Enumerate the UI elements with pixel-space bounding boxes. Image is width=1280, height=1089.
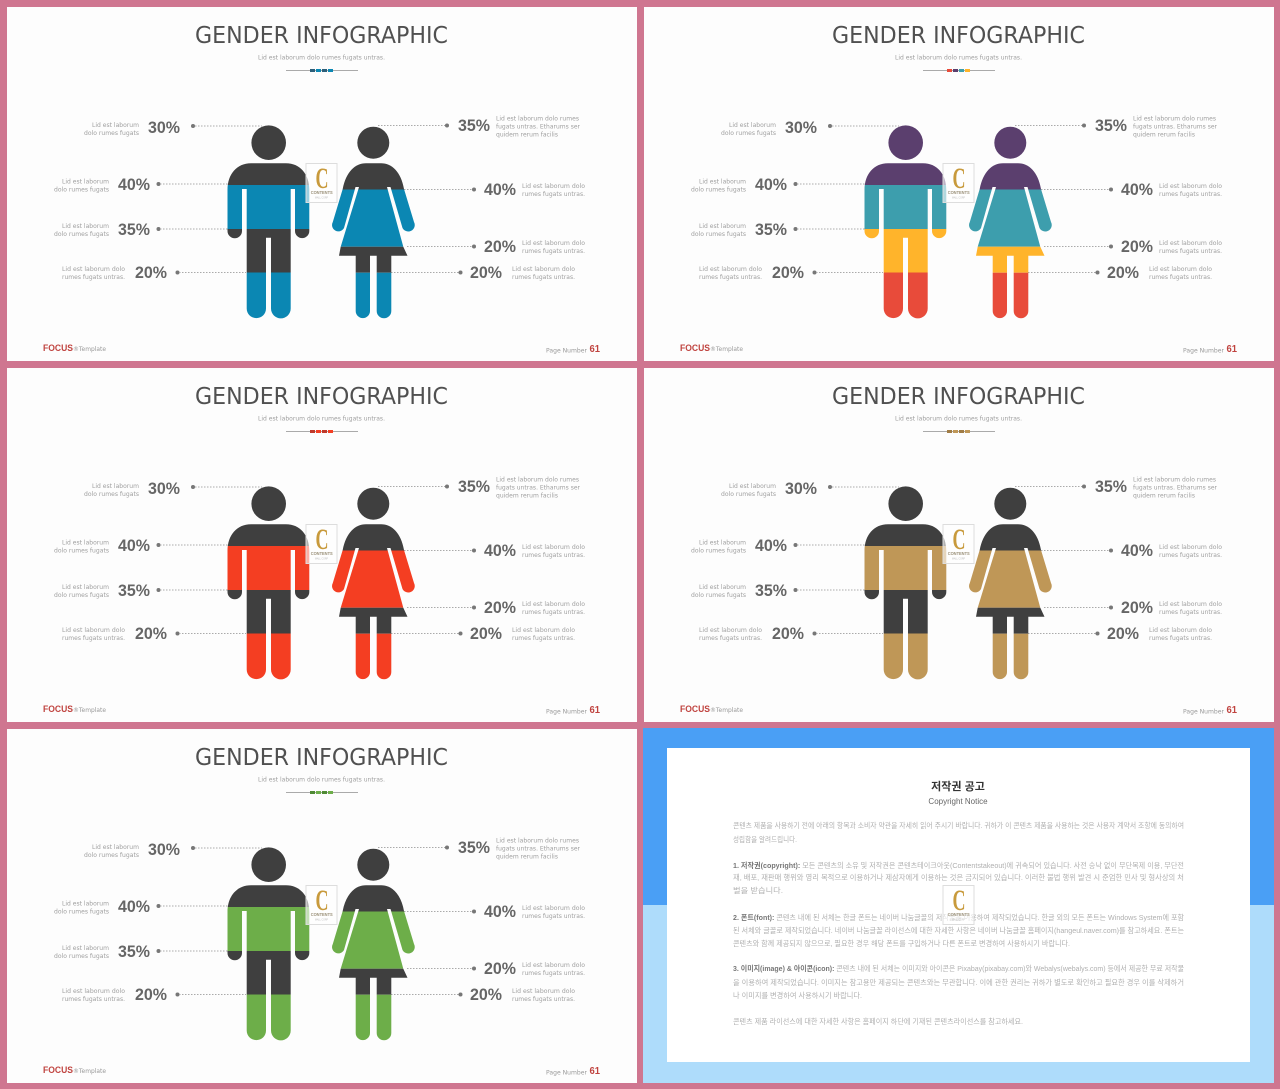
- watermark logo: [943, 523, 974, 564]
- callout: right 35%: Lid est laborum dolo rumes: [496, 116, 579, 122]
- section 3: image and icon: [733, 963, 1184, 1000]
- callout: left 30%: dolo rumes fugats: [721, 130, 776, 137]
- panel: blue slide: [7, 7, 637, 361]
- callout: left 35%: Lid est laborum: [62, 584, 109, 591]
- page number: [546, 705, 600, 716]
- callout: left 20%: Lid est laborum dolo: [699, 266, 762, 273]
- callout: right 35%: quidem rerum facilis: [496, 854, 558, 860]
- icon: man figure: [864, 486, 946, 680]
- callout: right 20% upper: Lid est laborum dolo: [522, 240, 585, 247]
- intro paragraph: [733, 820, 1184, 844]
- title: GENDER INFOGRAPHIC: [832, 23, 1085, 49]
- callout: right 40%: rumes fugats untras.: [522, 191, 585, 198]
- icon: woman figure: [969, 126, 1052, 318]
- watermark logo: C: [316, 162, 328, 195]
- callout: left 30%: 30%: [148, 119, 180, 137]
- callout: left 35%: Lid est laborum: [62, 223, 109, 230]
- intro paragraph: 성립함을 알려드립니다.: [733, 834, 797, 844]
- callout: right 20% upper: Lid est laborum dolo: [522, 962, 585, 969]
- page number: Page Number: [546, 1070, 588, 1076]
- callout: left 20%: Lid est laborum dolo: [62, 627, 125, 634]
- notice subheading: Copyright Notice: [928, 797, 988, 806]
- subtitle: Lid est laborum dolo rumes fugats untras.: [895, 416, 1022, 422]
- callout: left 40%: [54, 537, 228, 555]
- callout: left 30%: Lid est laborum: [729, 483, 776, 490]
- callout: left 20%: rumes fugats untras.: [62, 274, 125, 281]
- callout: left 30%: [84, 480, 262, 498]
- callout: left 40%: Lid est laborum: [699, 540, 746, 546]
- callout: left 20%: rumes fugats untras.: [62, 996, 125, 1003]
- section 2: font: 콘텐츠와 함께 제공되지 않으므로, 필요한 경우 해당 폰트를 구입하거나 다른 폰트로 변경하여 사용하시기 바랍니다.: [733, 938, 1070, 948]
- section 1: copyright: [733, 860, 1184, 895]
- callout: right 35%: 35%: [458, 839, 490, 857]
- callout: right 35%: 35%: [1095, 117, 1127, 135]
- notice heading: 저작권 공고: [931, 779, 985, 793]
- callout: left 35%: [691, 221, 865, 239]
- callout: right 20% lower: 20%: [470, 264, 502, 282]
- page number: Page Number: [1183, 348, 1225, 354]
- callout: left 20%: [62, 625, 246, 643]
- icon: man figure: [228, 486, 310, 680]
- title divider: [286, 430, 358, 433]
- watermark logo: C: [952, 162, 966, 195]
- callout: left 35%: Lid est laborum: [62, 945, 109, 952]
- callout: left 40%: Lid est laborum: [699, 178, 746, 186]
- section 1: copyright: 재, 배포, 재판매 행위와 영리 목적으로 이용하거나 제삼자에게 이용하는 것은 금지되어 있습니다. 이러한 불법 행위 발견 시 준엄한 민사 및 형사상의 처: [733, 872, 1184, 882]
- callout: left 30%: dolo rumes fugats: [721, 491, 776, 498]
- watermark logo: MALL CORP: [952, 918, 965, 922]
- callout: right 20% upper: rumes fugats untras.: [522, 609, 585, 616]
- callout: left 35%: 35%: [118, 943, 150, 961]
- watermark logo: [306, 884, 337, 924]
- callout: right 40%: rumes fugats untras.: [1159, 191, 1222, 198]
- callout: left 35%: dolo rumes fugats: [691, 592, 746, 599]
- callout: left 30%: 30%: [148, 841, 180, 859]
- callout: right 35%: Lid est laborum dolo rumes: [1133, 116, 1216, 122]
- callout: right 20% lower: [1028, 625, 1212, 643]
- panel: green slide: [7, 729, 637, 1083]
- callout: left 30%: [84, 841, 262, 859]
- callout: left 40%: dolo rumes fugats: [54, 186, 109, 194]
- footer brand: ®Template: [73, 1068, 106, 1075]
- icon: man figure: [864, 125, 946, 318]
- panel: copyright notice: [643, 728, 1274, 1083]
- callout: left 20%: rumes fugats untras.: [699, 635, 762, 642]
- section 1: copyright: 벌을 받습니다.: [733, 885, 783, 895]
- footer brand: FOCUS: [43, 343, 73, 354]
- callout: right 40%: [404, 181, 585, 199]
- callout: right 40%: Lid est laborum dolo: [522, 544, 585, 551]
- callout: right 20% upper: 20%: [484, 599, 516, 617]
- icon: woman figure: [969, 488, 1052, 680]
- title divider: [923, 69, 995, 72]
- page number: Page Number: [1183, 708, 1225, 716]
- callout: left 40%: Lid est laborum: [62, 540, 109, 546]
- watermark logo: MALL CORP: [952, 196, 965, 200]
- callout: left 35%: 35%: [755, 221, 787, 239]
- callout: left 35%: 35%: [755, 582, 787, 600]
- watermark logo: C: [952, 523, 966, 556]
- callout: right 20% upper: 20%: [1121, 238, 1153, 256]
- intro paragraph: 콘텐츠 제품을 사용하기 전에 아래의 항목과 소비자 약관을 자세히 읽어 주시기 바랍니다. 귀하가 이 콘텐츠 제품을 사용하는 것은 사용자 계약서 조항에 동의하여: [733, 820, 1184, 830]
- callout: right 35%: Lid est laborum dolo rumes: [496, 476, 579, 484]
- section 1: copyright: 1. 저작권(copyright): 모든 콘텐츠의 소유 및 저작권은 콘텐츠테이크아웃(Contentstakeout)에 귀속되어 있습니다. 사전 승낙 없이 무단복제 이용, 무단전: [733, 860, 1184, 870]
- panel: tan slide: [644, 368, 1274, 722]
- callout: left 20%: Lid est laborum dolo: [62, 266, 125, 273]
- closing line: 콘텐츠 제품 라이선스에 대한 자세한 사항은 홈페이지 하단에 기재된 콘텐츠라이선스를 참고하세요.: [733, 1016, 1023, 1026]
- callout: right 20% upper: 20%: [1121, 599, 1153, 617]
- callout: left 30%: [721, 480, 899, 498]
- title divider: [923, 430, 995, 433]
- callout: right 40%: [1041, 181, 1222, 199]
- callout: right 20% upper: [1044, 599, 1222, 617]
- callout: left 20%: rumes fugats untras.: [699, 274, 762, 281]
- callout: right 20% upper: rumes fugats untras.: [522, 248, 585, 255]
- callout: right 35%: Lid est laborum dolo rumes: [496, 838, 579, 844]
- page number: 61: [1226, 705, 1237, 716]
- callout: left 30%: Lid est laborum: [92, 122, 139, 129]
- watermark logo: CONTENTS: [948, 551, 970, 556]
- callout: right 20% lower: 20%: [1107, 625, 1139, 643]
- callout: right 20% lower: rumes fugats untras.: [512, 274, 575, 281]
- callout: left 40%: dolo rumes fugats: [691, 186, 746, 194]
- callout: right 20% upper: [407, 238, 585, 256]
- title divider: [286, 69, 358, 72]
- callout: right 40%: Lid est laborum dolo: [522, 905, 585, 912]
- callout: right 40%: 40%: [484, 903, 516, 921]
- callout: left 35%: 35%: [118, 221, 150, 239]
- page number: [1183, 344, 1237, 355]
- callout: right 20% upper: rumes fugats untras.: [1159, 248, 1222, 255]
- page number: [546, 1066, 600, 1077]
- callout: right 20% lower: 20%: [470, 986, 502, 1004]
- callout: right 35%: 35%: [458, 478, 490, 496]
- callout: right 20% lower: rumes fugats untras.: [512, 996, 575, 1003]
- icon: woman figure: [332, 848, 415, 1040]
- callout: right 40%: [1041, 542, 1222, 560]
- page number: 61: [1226, 344, 1237, 355]
- page number: Page Number: [546, 348, 588, 354]
- callout: right 20% lower: Lid est laborum dolo: [512, 266, 575, 273]
- icon: woman figure: [332, 126, 415, 318]
- watermark logo: [943, 162, 974, 202]
- callout: right 20% lower: Lid est laborum dolo: [512, 988, 575, 995]
- callout: right 40%: [404, 903, 585, 921]
- callout: left 35%: Lid est laborum: [699, 584, 746, 591]
- section 3: image and icon: 3. 이미지(image) & 아이콘(icon): 콘텐츠 내에 된 서체는 이미지와 아이콘은 Pixabay(pixabay.com)와 Webalys(webalys.com) 등에서 제공한 무료 저작물: [733, 963, 1184, 973]
- callout: left 30%: 30%: [148, 480, 180, 498]
- watermark logo: C: [316, 884, 328, 917]
- callout: left 30%: Lid est laborum: [729, 122, 776, 129]
- callout: right 20% upper: Lid est laborum dolo: [1159, 601, 1222, 608]
- callout: right 35%: quidem rerum facilis: [496, 132, 558, 138]
- callout: right 40%: [404, 542, 585, 560]
- callout: right 20% lower: 20%: [1107, 264, 1139, 282]
- footer brand: [43, 343, 106, 354]
- watermark logo: CONTENTS: [948, 912, 970, 917]
- watermark logo: MALL CORP: [315, 556, 328, 560]
- callout: left 30%: [721, 119, 899, 137]
- watermark logo: CONTENTS: [311, 190, 333, 195]
- callout: left 20%: 20%: [135, 986, 167, 1004]
- callout: right 35%: [378, 476, 580, 500]
- watermark logo: CONTENTS: [311, 551, 333, 556]
- callout: right 35%: [1015, 116, 1217, 138]
- callout: left 35%: Lid est laborum: [699, 223, 746, 230]
- callout: left 35%: 35%: [118, 582, 150, 600]
- footer brand: ®Template: [73, 707, 106, 714]
- callout: right 40%: Lid est laborum dolo: [522, 183, 585, 190]
- callout: left 30%: dolo rumes fugats: [84, 491, 139, 498]
- icon: man figure: [228, 847, 310, 1040]
- callout: left 20%: Lid est laborum dolo: [62, 988, 125, 995]
- page number: 61: [590, 705, 600, 716]
- callout: left 20%: rumes fugats untras.: [62, 635, 125, 642]
- callout: left 35%: [54, 582, 228, 600]
- callout: left 35%: dolo rumes fugats: [691, 231, 746, 238]
- callout: left 40%: Lid est laborum: [62, 178, 109, 186]
- callout: left 20%: [699, 264, 883, 282]
- callout: left 40%: Lid est laborum: [62, 900, 109, 908]
- page number: [546, 344, 600, 355]
- watermark logo: CONTENTS: [311, 912, 333, 917]
- callout: left 40%: dolo rumes fugats: [54, 548, 109, 554]
- callout: right 20% lower: rumes fugats untras.: [1149, 274, 1212, 281]
- callout: left 20%: [699, 625, 883, 643]
- callout: right 20% upper: 20%: [484, 960, 516, 978]
- callout: right 35%: Lid est laborum dolo rumes: [1133, 476, 1216, 484]
- callout: right 35%: fugats untras. Etharums ser: [1133, 484, 1217, 492]
- section 2: font: 된 서체와 글꼴로 제작되었습니다. 네이버 나눔글꼴 라이선스에 대한 자세한 사항은 네이버 나눔글꼴 홈페이지(hangeul.naver.com)를 참고하세요. 폰트는: [733, 925, 1184, 935]
- section 2: font: [733, 912, 1184, 948]
- callout: right 20% upper: rumes fugats untras.: [522, 970, 585, 977]
- title: GENDER INFOGRAPHIC: [832, 384, 1085, 410]
- footer brand: ®Template: [73, 346, 106, 353]
- callout: left 35%: dolo rumes fugats: [54, 231, 109, 238]
- title: GENDER INFOGRAPHIC: [195, 23, 448, 49]
- callout: right 20% lower: 20%: [470, 625, 502, 643]
- callout: left 20%: [62, 986, 246, 1004]
- footer brand: [43, 1065, 106, 1076]
- panel: multicolor slide: [644, 7, 1274, 361]
- callout: right 40%: Lid est laborum dolo: [1159, 544, 1222, 551]
- callout: left 30%: 30%: [785, 480, 817, 498]
- page number: Page Number: [546, 708, 588, 716]
- callout: left 30%: [84, 119, 262, 137]
- callout: right 35%: quidem rerum facilis: [496, 492, 558, 500]
- callout: left 30%: dolo rumes fugats: [84, 852, 139, 859]
- callout: left 40%: 40%: [118, 176, 150, 194]
- watermark logo: C: [952, 884, 966, 917]
- subtitle: Lid est laborum dolo rumes fugats untras.: [258, 416, 385, 422]
- footer brand: [680, 704, 743, 715]
- callout: right 40%: 40%: [1121, 542, 1153, 560]
- callout: right 35%: fugats untras. Etharums ser: [496, 484, 580, 492]
- callout: left 20%: 20%: [772, 625, 804, 643]
- icon: woman figure: [332, 488, 415, 680]
- callout: right 40%: rumes fugats untras.: [1159, 552, 1222, 559]
- footer brand: [43, 704, 106, 715]
- callout: left 20%: [62, 264, 246, 282]
- callout: right 35%: fugats untras. Etharums ser: [496, 846, 580, 852]
- callout: right 20% lower: [391, 986, 575, 1004]
- section 3: image and icon: 을 이용하여 제작되었습니다. 이미지는 참고용만 제공되는 콘텐츠와는 무관합니다. 이에 관한 권리는 귀하가 별도로 확인하고 필요한 경우 이를 삭제하거: [733, 977, 1184, 987]
- callout: right 35%: fugats untras. Etharums ser: [496, 124, 580, 130]
- footer brand: ®Template: [710, 707, 743, 714]
- callout: left 35%: [54, 221, 228, 239]
- footer brand: FOCUS: [43, 704, 73, 715]
- title: GENDER INFOGRAPHIC: [195, 384, 448, 410]
- watermark logo: [306, 162, 337, 202]
- callout: right 20% upper: Lid est laborum dolo: [1159, 240, 1222, 247]
- callout: right 35%: 35%: [1095, 478, 1127, 496]
- callout: left 40%: [691, 176, 865, 194]
- subtitle: Lid est laborum dolo rumes fugats untras.: [258, 54, 385, 62]
- callout: right 20% lower: [1028, 264, 1212, 282]
- watermark logo: [306, 523, 337, 564]
- callout: left 35%: dolo rumes fugats: [54, 953, 109, 960]
- page number: 61: [590, 344, 600, 355]
- callout: right 20% lower: [391, 625, 575, 643]
- watermark logo: C: [316, 523, 328, 556]
- callout: left 20%: Lid est laborum dolo: [699, 627, 762, 634]
- callout: left 40%: 40%: [755, 176, 787, 194]
- callout: right 35%: [1015, 476, 1217, 500]
- callout: right 20% lower: rumes fugats untras.: [1149, 635, 1212, 642]
- callout: right 20% upper: [407, 960, 585, 978]
- callout: left 40%: 40%: [755, 537, 787, 555]
- callout: left 30%: dolo rumes fugats: [84, 130, 139, 137]
- callout: right 35%: 35%: [458, 117, 490, 135]
- footer brand: FOCUS: [680, 343, 710, 354]
- callout: right 20% upper: rumes fugats untras.: [1159, 609, 1222, 616]
- callout: right 40%: rumes fugats untras.: [522, 913, 585, 920]
- section 3: image and icon: 나 이미지를 변경하여 사용하시기 바랍니다.: [733, 990, 862, 1000]
- callout: right 20% upper: [1044, 238, 1222, 256]
- callout: right 40%: 40%: [484, 181, 516, 199]
- icon: man figure: [228, 125, 310, 318]
- callout: right 40%: Lid est laborum dolo: [1159, 183, 1222, 190]
- callout: left 40%: 40%: [118, 898, 150, 916]
- callout: right 35%: fugats untras. Etharums ser: [1133, 124, 1217, 130]
- callout: left 40%: [691, 537, 865, 555]
- callout: left 30%: Lid est laborum: [92, 844, 139, 851]
- callout: right 40%: 40%: [484, 542, 516, 560]
- page number: 61: [590, 1066, 600, 1077]
- watermark logo: MALL CORP: [315, 196, 328, 200]
- callout: left 40%: [54, 176, 228, 194]
- callout: left 35%: [54, 943, 228, 961]
- footer brand: FOCUS: [43, 1065, 73, 1076]
- title divider: [286, 791, 358, 794]
- watermark logo: CONTENTS: [948, 190, 970, 195]
- callout: right 35%: [378, 116, 580, 138]
- callout: right 20% lower: Lid est laborum dolo: [1149, 266, 1212, 273]
- callout: right 40%: 40%: [1121, 181, 1153, 199]
- footer brand: ®Template: [710, 346, 743, 353]
- title: GENDER INFOGRAPHIC: [195, 745, 448, 771]
- callout: left 40%: dolo rumes fugats: [54, 908, 109, 916]
- callout: right 20% lower: rumes fugats untras.: [512, 635, 575, 642]
- callout: right 20% upper: 20%: [484, 238, 516, 256]
- subtitle: Lid est laborum dolo rumes fugats untras.: [895, 54, 1022, 62]
- callout: right 40%: rumes fugats untras.: [522, 552, 585, 559]
- callout: left 35%: dolo rumes fugats: [54, 592, 109, 599]
- callout: right 35%: quidem rerum facilis: [1133, 132, 1195, 138]
- callout: left 40%: 40%: [118, 537, 150, 555]
- callout: left 30%: Lid est laborum: [92, 483, 139, 490]
- panel: red slide: [7, 368, 637, 722]
- page number: [1183, 705, 1237, 716]
- callout: left 35%: [691, 582, 865, 600]
- callout: right 20% lower: Lid est laborum dolo: [512, 627, 575, 634]
- callout: left 30%: 30%: [785, 119, 817, 137]
- callout: right 20% upper: Lid est laborum dolo: [522, 601, 585, 608]
- section 2: font: 2. 폰트(font): 콘텐츠 내에 된 서체는 한글 폰트는 네이버 나눔글꼴의 저작물을 이용하여 제작되었습니다. 한글 외의 모든 폰트는 Windows System에 포함: [733, 912, 1184, 922]
- footer brand: FOCUS: [680, 704, 710, 715]
- callout: left 40%: dolo rumes fugats: [691, 548, 746, 554]
- callout: left 40%: [54, 898, 228, 916]
- watermark logo: MALL CORP: [315, 918, 328, 922]
- callout: right 35%: quidem rerum facilis: [1133, 492, 1195, 500]
- watermark logo: [943, 884, 974, 924]
- callout: right 35%: [378, 838, 580, 860]
- callout: left 20%: 20%: [772, 264, 804, 282]
- callout: left 20%: 20%: [135, 264, 167, 282]
- watermark logo: MALL CORP: [952, 556, 965, 560]
- callout: left 20%: 20%: [135, 625, 167, 643]
- callout: right 20% upper: [407, 599, 585, 617]
- callout: right 20% lower: Lid est laborum dolo: [1149, 627, 1212, 634]
- footer brand: [680, 343, 743, 354]
- callout: right 20% lower: [391, 264, 575, 282]
- subtitle: Lid est laborum dolo rumes fugats untras.: [258, 776, 385, 784]
